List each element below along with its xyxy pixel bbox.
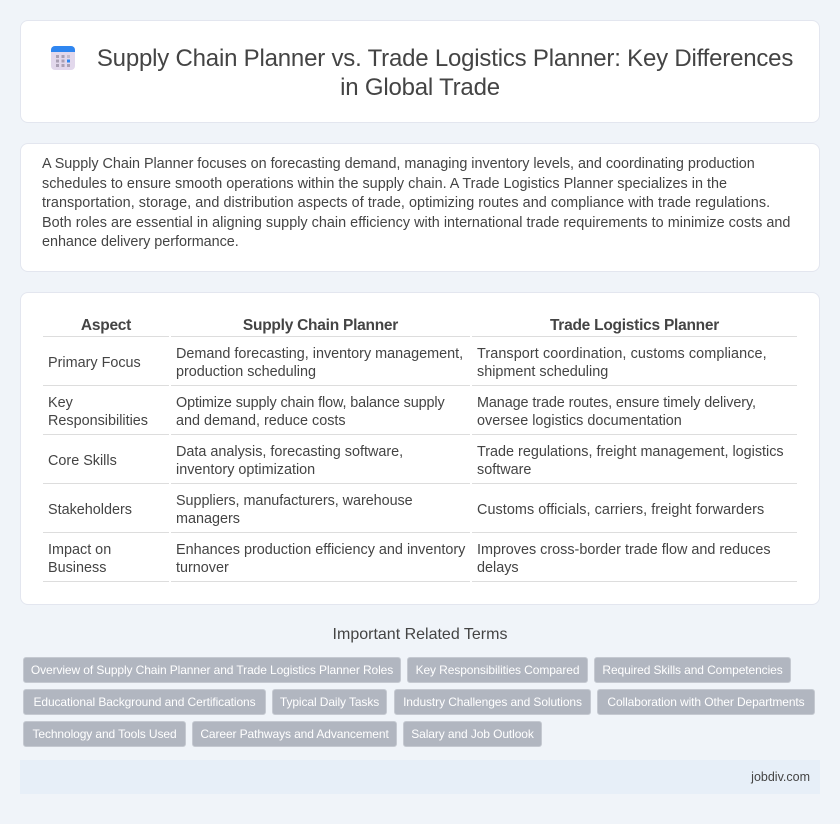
row: key responsibilities: Optimize supply chain flow, balance supply [176, 395, 445, 411]
row: impact on business: Impact on [48, 542, 111, 558]
tag [23, 657, 401, 683]
row: impact on business [48, 542, 771, 576]
intro paragraph: schedules to ensure smooth operations within the supply chain. A Trade Logistics Planner specializes in the [42, 176, 727, 192]
tag: Industry Challenges and Solutions [403, 695, 582, 709]
row: primary focus: shipment scheduling [477, 364, 608, 380]
row: key responsibilities: Responsibilities [48, 413, 148, 429]
intro paragraph: enhance delivery performance. [42, 234, 239, 250]
row: key responsibilities: Key [48, 395, 73, 411]
title: in Global Trade [340, 74, 500, 101]
tag [594, 657, 791, 683]
row: primary focus: Demand forecasting, inventory management, [176, 346, 463, 362]
tag [407, 657, 588, 683]
table header [81, 317, 720, 334]
row: primary focus: Transport coordination, customs compliance, [477, 346, 767, 362]
tag [23, 721, 186, 747]
row: stakeholders [48, 493, 764, 527]
intro text panel [20, 143, 820, 272]
row: impact on business: Improves cross-border trade flow and reduces [477, 542, 771, 558]
row: core skills: inventory optimization [176, 462, 315, 478]
row: core skills: Trade regulations, freight management, logistics [477, 444, 784, 460]
icon: calendar [51, 46, 75, 70]
tag: Collaboration with Other Departments [607, 695, 805, 709]
row: key responsibilities: Manage trade routes, ensure timely delivery, [477, 395, 756, 411]
tag: Educational Background and Certifications [33, 695, 256, 709]
tag: Technology and Tools Used [32, 727, 177, 741]
row: key responsibilities: and demand, reduce costs [176, 413, 346, 429]
tag: Career Pathways and Advancement [200, 727, 389, 741]
tag: Overview of Supply Chain Planner and Trade Logistics Planner Roles [31, 663, 393, 677]
row: impact on business: delays [477, 560, 519, 576]
tag: Key Responsibilities Compared [416, 663, 579, 677]
row: stakeholders: Stakeholders [48, 502, 132, 518]
comparison table panel [20, 292, 820, 605]
tag [272, 689, 387, 715]
row: stakeholders: Suppliers, manufacturers, warehouse [176, 493, 413, 509]
tag [23, 689, 266, 715]
tag: Required Skills and Competencies [602, 663, 783, 677]
intro paragraph: transportation, storage, and distribution aspects of trade, optimizing routes and compliance with trade regulations. [42, 194, 770, 210]
tag [597, 689, 815, 715]
row: primary focus [48, 346, 767, 380]
row: stakeholders: Customs officials, carriers, freight forwarders [477, 502, 764, 518]
row: primary focus: Primary Focus [48, 355, 141, 371]
tag [192, 721, 397, 747]
tag: Salary and Job Outlook [411, 727, 534, 741]
row: core skills: Data analysis, forecasting software, [176, 444, 403, 460]
footer bar [20, 760, 820, 794]
header panel [20, 20, 820, 123]
row: primary focus: production scheduling [176, 364, 316, 380]
row: core skills: Core Skills [48, 453, 117, 469]
related terms heading: Important Related Terms [333, 626, 507, 643]
row: impact on business: Business [48, 560, 106, 576]
table header: Supply Chain Planner [243, 317, 398, 334]
related term tags [23, 657, 815, 747]
title: Supply Chain Planner vs. Trade Logistics Planner: Key Differences [97, 45, 793, 72]
footer source text: jobdiv.com [751, 770, 810, 784]
table header: Trade Logistics Planner [550, 317, 719, 334]
title [97, 45, 793, 101]
tag [403, 721, 542, 747]
tag: Typical Daily Tasks [280, 695, 379, 709]
row: impact on business: turnover [176, 560, 229, 576]
row: key responsibilities [48, 395, 756, 429]
intro paragraph: Both roles are essential in aligning supply chain efficiency with international trade requirements to minimize costs and [42, 214, 790, 230]
intro paragraph: A Supply Chain Planner focuses on forecasting demand, managing inventory levels, and coordinating production [42, 156, 755, 172]
tag [394, 689, 591, 715]
intro paragraph [42, 156, 790, 250]
row: core skills: software [477, 462, 531, 478]
table header: Aspect [81, 317, 131, 334]
row: key responsibilities: oversee logistics documentation [477, 413, 682, 429]
row: impact on business: Enhances production efficiency and inventory [176, 542, 465, 558]
row: core skills [48, 444, 784, 478]
row: stakeholders: managers [176, 511, 240, 527]
